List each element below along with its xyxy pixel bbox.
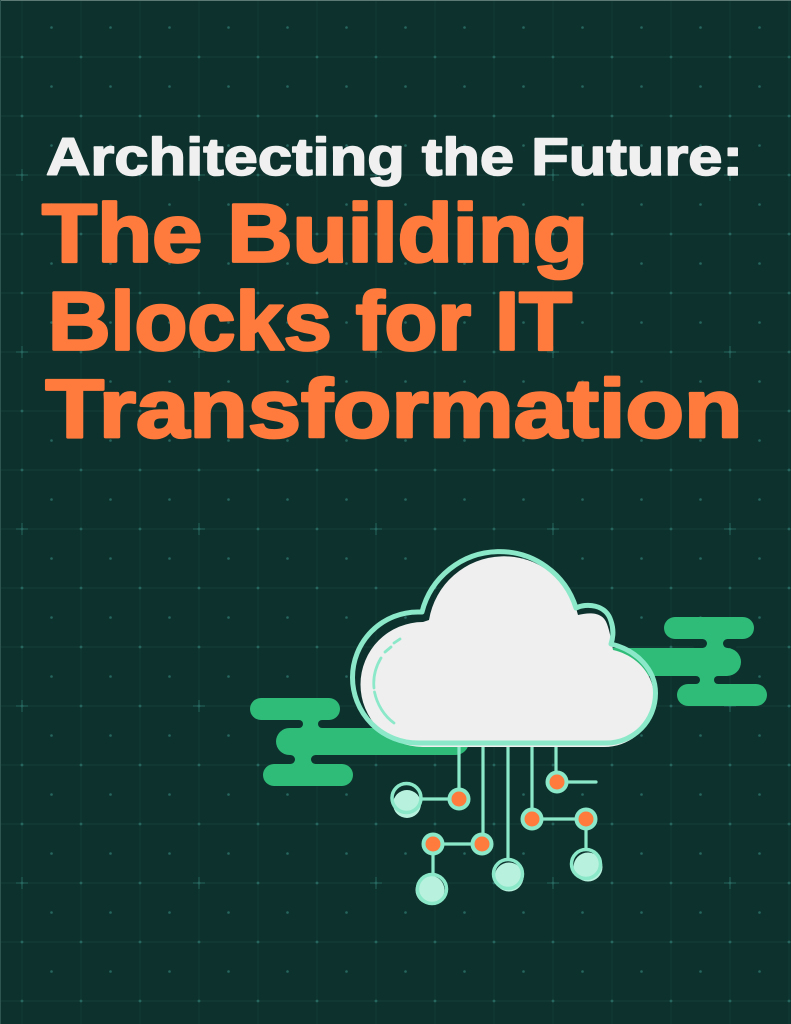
icon: end node right [571,849,602,882]
icon: cloud outline [352,552,656,743]
illustration: cloud network [250,552,767,904]
icon: orange nodes [424,772,596,854]
title [42,128,743,455]
icon: end node left [392,783,422,818]
icon: left green cloud [250,698,469,786]
icon: end node lower left [416,874,447,904]
icon: right green cloud [600,617,767,706]
icon: circuit lines [407,745,596,889]
title line: Transformation: Transformation [46,362,742,455]
icon: end node middle [493,859,524,892]
icon: cloud body [360,556,654,747]
title line: The Building: The Building [42,186,588,280]
title line: Architecting the Future: Architecting the Future: [46,128,743,187]
icon: cloud highlight [374,639,400,723]
title line: Blocks for IT: Blocks for IT [48,274,572,368]
